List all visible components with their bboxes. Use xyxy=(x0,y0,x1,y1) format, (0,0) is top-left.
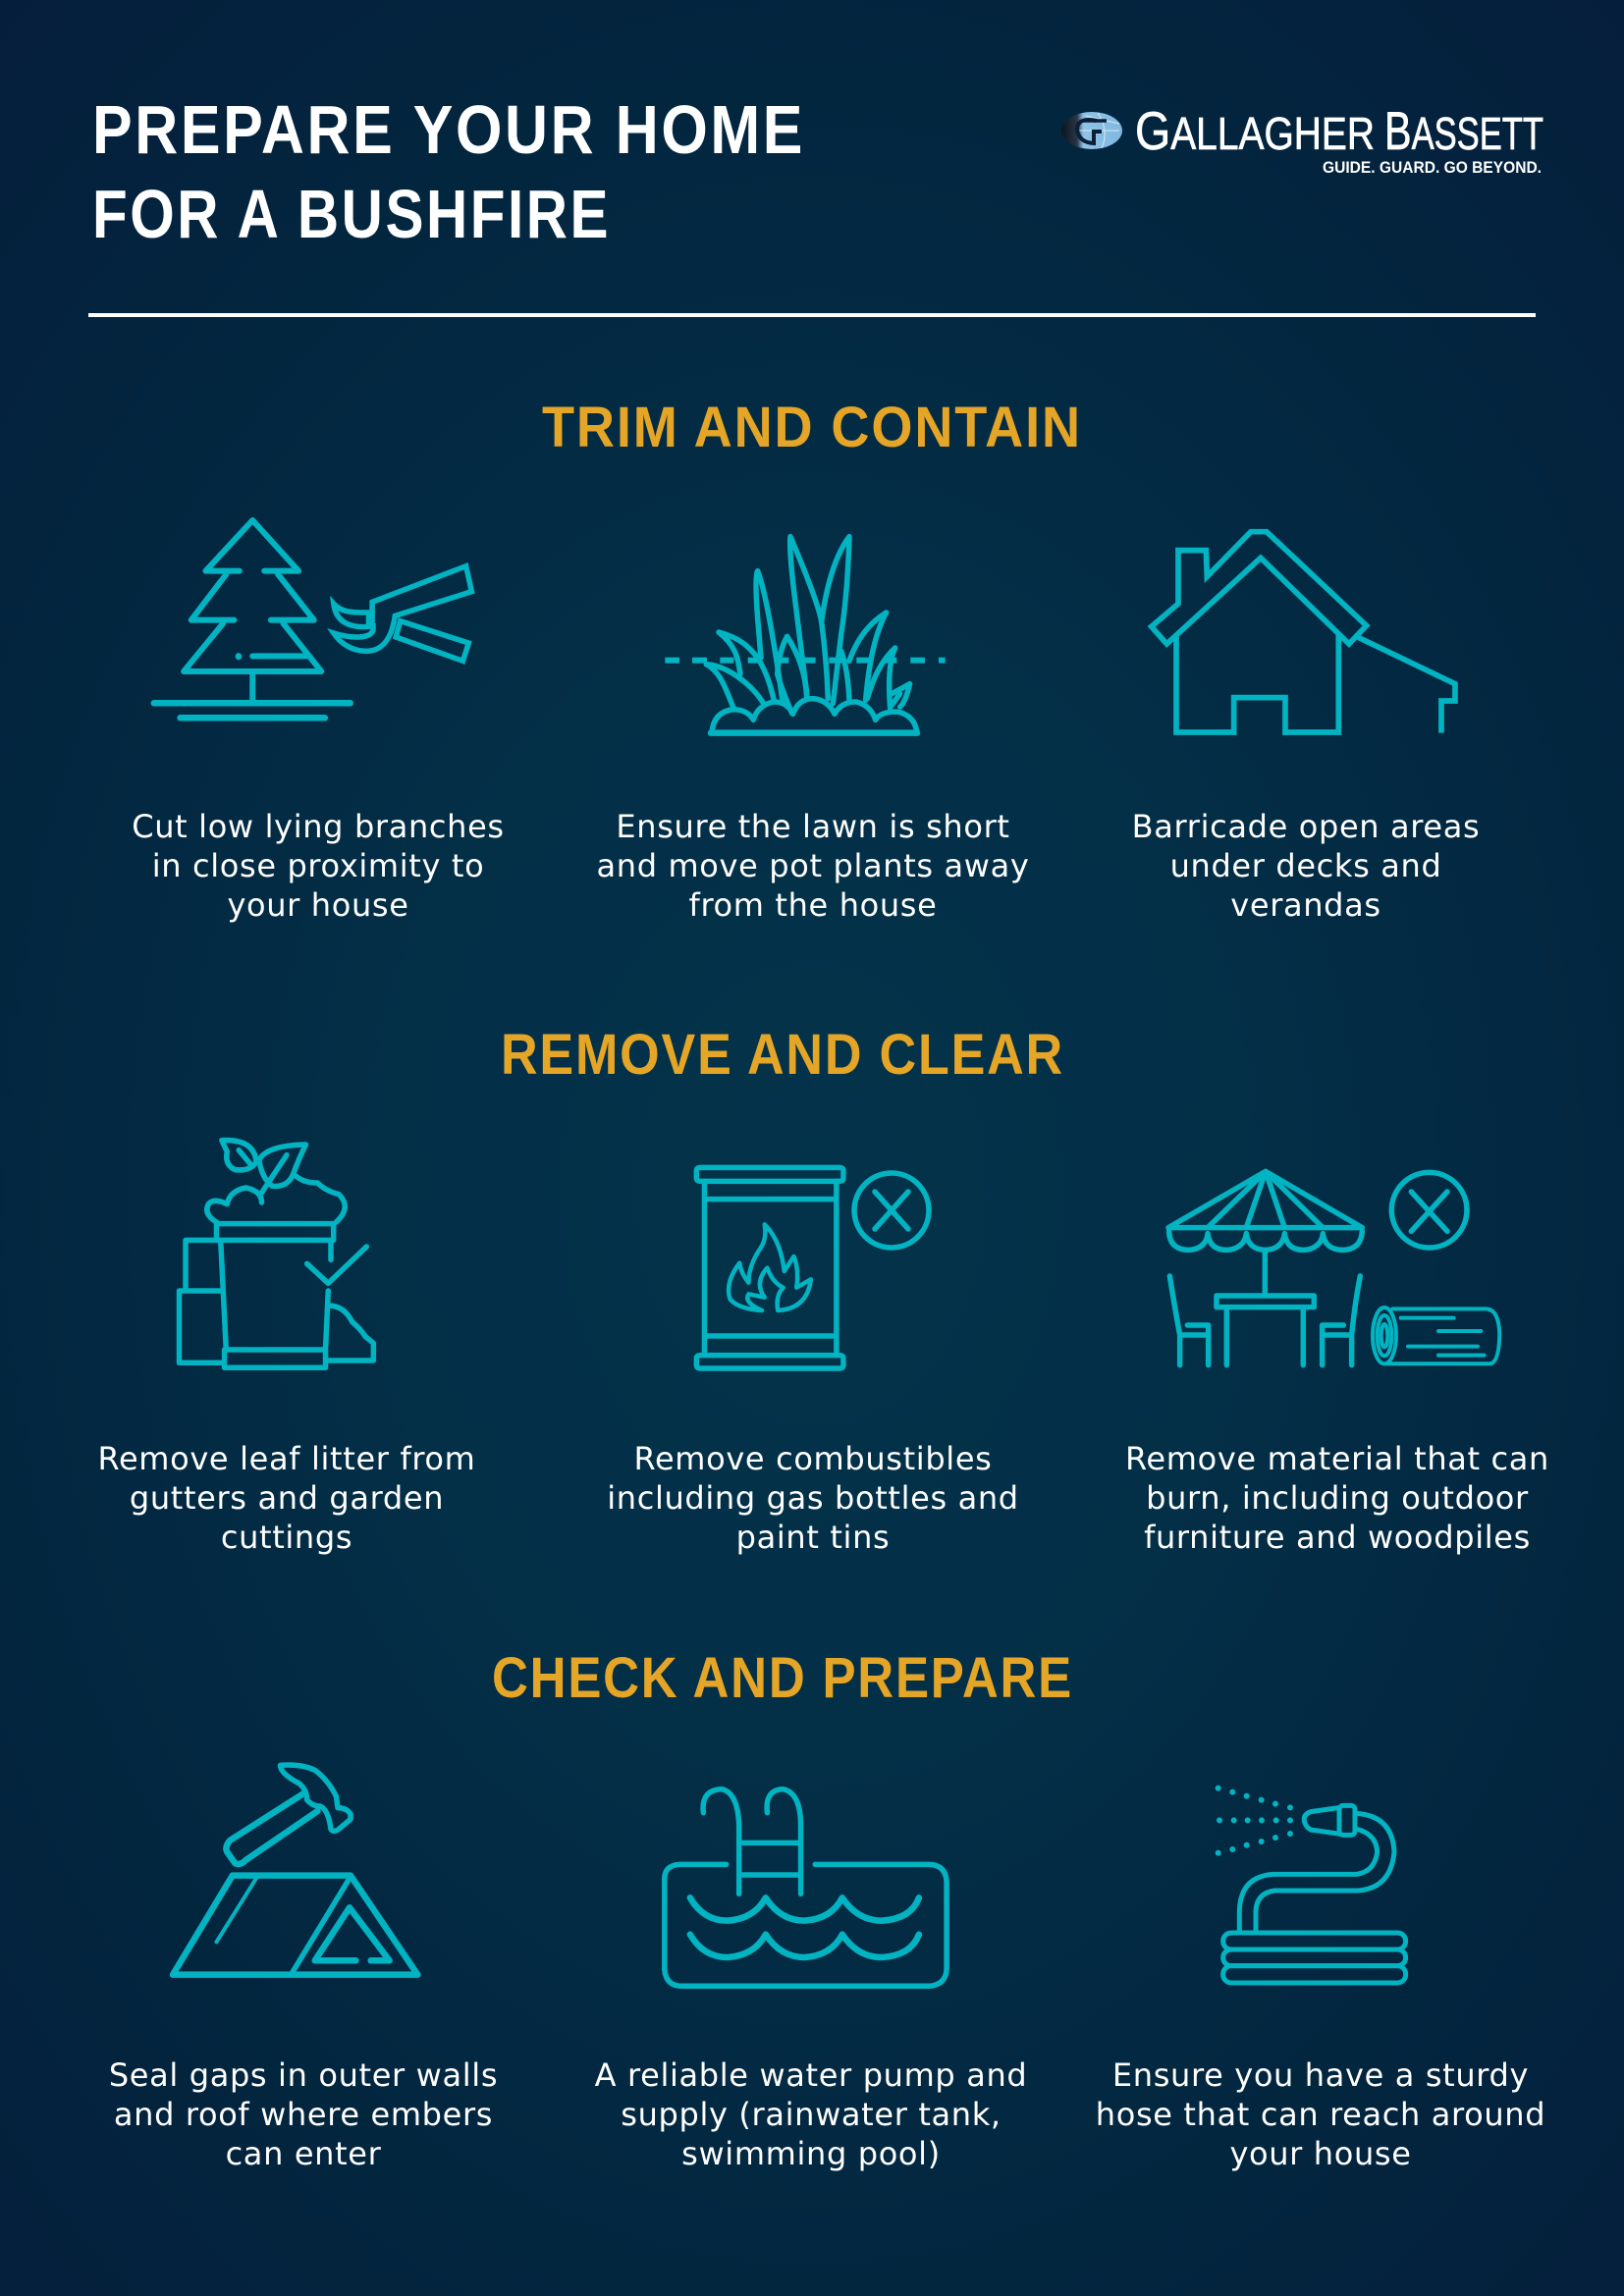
text: combustibles: including gas bottles and xyxy=(607,1479,1019,1517)
icon: garden hose xyxy=(1216,1786,1406,1983)
heading: trim and contain: TRIM AND CONTAIN xyxy=(542,396,1082,459)
text: water pump: A reliable water pump and xyxy=(595,2056,1027,2094)
text: hose: your house xyxy=(1229,2135,1412,2172)
text: seal gaps: and roof where embers xyxy=(114,2096,493,2133)
text: material: furniture and woodpiles xyxy=(1144,1519,1531,1556)
logo globe icon xyxy=(1061,112,1122,149)
logo wordmark: BASSETT xyxy=(1384,100,1543,161)
heading: remove and clear: REMOVE AND CLEAR xyxy=(501,1023,1064,1087)
text: trim row xyxy=(132,808,505,924)
icon: swimming pool xyxy=(665,1789,947,1986)
water spray xyxy=(1216,1786,1293,1856)
text: material: Remove material that can xyxy=(1125,1440,1549,1477)
text: leaf litter: cuttings xyxy=(221,1519,352,1556)
text: hose xyxy=(1096,2056,1545,2172)
text: lawn: and move pot plants away xyxy=(597,847,1029,884)
logo wordmark: GALLAGHER xyxy=(1135,100,1375,161)
icon: tree and shears xyxy=(154,520,471,718)
text: lawn xyxy=(597,808,1029,924)
text: seal gaps: Seal gaps in outer walls xyxy=(109,2056,498,2094)
title xyxy=(92,91,805,252)
heading: check and prepare: CHECK AND PREPARE xyxy=(492,1646,1073,1710)
log xyxy=(1373,1308,1499,1363)
text: barricade: under decks and xyxy=(1170,847,1441,884)
text: trim row: your house xyxy=(227,886,409,924)
text: trim row: Cut low lying branches xyxy=(132,808,505,845)
icon: outdoor furniture and log xyxy=(1168,1171,1499,1365)
logo: Gallagher Bassett xyxy=(1061,100,1543,177)
text: material xyxy=(1125,1440,1549,1556)
text: lawn: from the house xyxy=(689,886,937,924)
text: combustibles: Remove combustibles xyxy=(634,1440,992,1477)
logo wordmark xyxy=(1135,100,1543,161)
title: FOR A BUSHFIRE xyxy=(92,176,611,252)
tree xyxy=(154,520,351,718)
text: material: burn, including outdoor xyxy=(1146,1479,1529,1517)
icon: hammer and roof xyxy=(173,1765,417,1975)
text: hose: hose that can reach around xyxy=(1096,2096,1545,2133)
text: combustibles xyxy=(607,1440,1019,1556)
text: water pump: supply (rainwater tank, xyxy=(621,2096,1001,2133)
text: leaf litter: gutters and garden xyxy=(130,1479,444,1517)
text: lawn: Ensure the lawn is short xyxy=(616,808,1010,845)
text: leaf litter: Remove leaf litter from xyxy=(98,1440,475,1477)
icon: house with annex xyxy=(1152,532,1455,733)
text: seal gaps: can enter xyxy=(226,2135,382,2172)
icon: combustible barrel xyxy=(696,1167,843,1368)
text: combustibles: paint tins xyxy=(736,1519,890,1556)
text: hose: Ensure you have a sturdy xyxy=(1112,2056,1529,2094)
flame xyxy=(729,1224,811,1310)
title: PREPARE YOUR HOME xyxy=(92,91,805,168)
text: barricade: verandas xyxy=(1230,886,1381,924)
text: seal gaps xyxy=(109,2056,498,2172)
logo tagline: GUIDE. GUARD. GO BEYOND. xyxy=(1323,158,1542,177)
shears xyxy=(334,566,471,661)
icon: grass with height line xyxy=(665,537,946,733)
icon: no symbol, barrel xyxy=(854,1173,929,1248)
text: barricade xyxy=(1132,808,1480,924)
text: leaf litter xyxy=(98,1440,475,1556)
text: water pump: swimming pool) xyxy=(681,2135,941,2172)
text: water pump xyxy=(595,2056,1027,2172)
text: trim row: in close proximity to xyxy=(152,847,484,884)
icon: green waste bin with check xyxy=(180,1141,373,1367)
text: barricade: Barricade open areas xyxy=(1132,808,1480,845)
